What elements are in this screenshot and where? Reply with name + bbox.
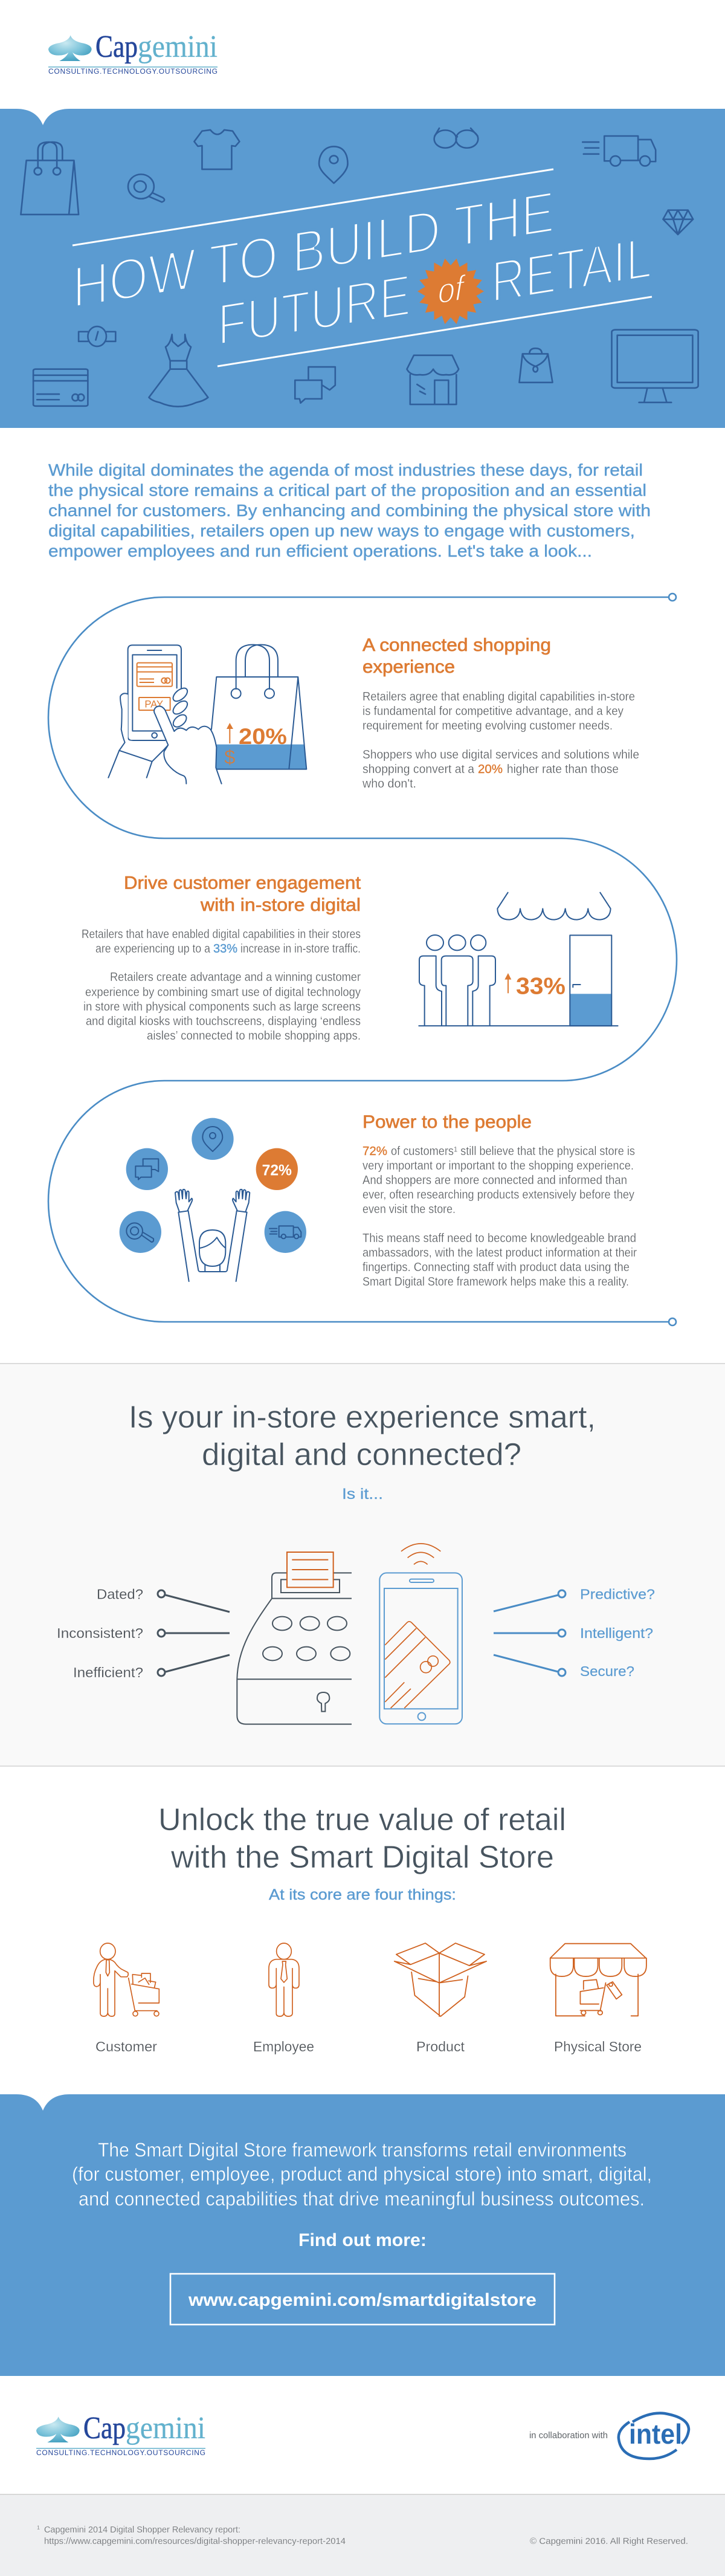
text block: connected shopping body: higher rate than those (507, 763, 619, 776)
text block: footnote: https://www.capgemini.com/resources/digital-shopper-relevancy-report-2014 (44, 2537, 346, 2546)
icon: glasses (434, 128, 478, 148)
heading: drive customer engagement: Drive customer engagement (124, 873, 361, 893)
intro text: channel for customers. By enhancing and combining the physical store with (48, 501, 651, 520)
text block: framework description: (for customer, employee, product and physical store) into smart, digital, (72, 2163, 652, 2185)
text block: in-store digital body: Retailers that have enabled digital capabilities in their stores (82, 928, 361, 941)
text block: in-store digital body: are experiencing up to a (95, 942, 211, 956)
icon: magnifier (128, 174, 164, 202)
heading: unlock the true value of retail: Unlock the true value of retail (158, 1802, 566, 1837)
logo: Capgemini header: Cap (95, 30, 138, 64)
panel: hero banner (0, 109, 725, 428)
intro text: the physical store remains a critical part of the proposition and an essential (48, 481, 646, 499)
labels: dated, inconsistent, inefficient: Dated? (97, 1586, 143, 1602)
icon: handbag (519, 348, 553, 383)
icon: shopping bag (21, 142, 79, 215)
text block: power to the people body: fingertips. Connecting staff with product data using the (362, 1261, 630, 1274)
labels: four things: Employee (253, 2039, 314, 2054)
text block: footnote: 1 (37, 2525, 40, 2531)
illustration: store traffic 33% (419, 893, 618, 1026)
text block: connected shopping body: is fundamental for competitive advantage, and a key (362, 705, 624, 718)
text block: power to the people body: Smart Digital Store framework helps make this a reality. (362, 1275, 629, 1289)
title: how to build the future of retail: of (438, 268, 466, 311)
illustration: cash register (237, 1552, 352, 1724)
text block: framework description: and connected capabilities that drive meaningful business outcomes. (79, 2188, 645, 2210)
intro text: digital capabilities, retailers open up new ways to engage with customers, (48, 521, 635, 540)
text: in collaboration with: in collaboration with (529, 2430, 608, 2441)
panel: in-store experience check (0, 1363, 725, 1767)
labels: dated, inconsistent, inefficient: Inconsistent? (57, 1625, 143, 1641)
logo: Capgemini footer: gemini (126, 2411, 205, 2445)
heading: unlock the true value of retail: with the Smart Digital Store (170, 1840, 554, 1875)
icon: delivery truck (582, 136, 656, 166)
labels: predictive, intelligent, secure (580, 1586, 655, 1679)
text block: in-store digital body: Retailers create advantage and a winning customer (110, 971, 361, 984)
text block: in-store digital body: and digital kiosks with touchscreens, displaying ‘endless (86, 1015, 361, 1028)
logo: intel (619, 2413, 689, 2459)
winding path connector (48, 594, 677, 1325)
text block: connected shopping body (362, 690, 639, 791)
illustration: phone payment and shopping bag: PAY (144, 699, 163, 710)
icon: credit card (33, 369, 88, 406)
text block: in-store digital body: experience by combining smart use of digital technology (85, 986, 361, 999)
button: url: www.capgemini.com/smartdigitalstore (188, 2290, 536, 2310)
text block: framework description: The Smart Digital Store framework transforms retail environments (98, 2139, 627, 2161)
icon: dress (149, 334, 208, 407)
text block: connected shopping body: shopping convert at a (362, 763, 475, 776)
labels: predictive, intelligent, secure: Predictive? (580, 1586, 655, 1602)
heading: a connected shopping experience: A connected shopping (362, 635, 551, 655)
heading: power to the people: Power to the people (362, 1112, 532, 1132)
text block: power to the people body: This means staff need to become knowledgeable brand (362, 1232, 636, 1245)
icon: employee (269, 1943, 299, 2016)
text block: power to the people body: 72% (362, 1145, 387, 1158)
heading: drive customer engagement: with in-store digital (200, 895, 361, 915)
text block: in-store digital body: in store with physical components such as large screens (83, 1000, 361, 1014)
panel: call to action (0, 2094, 725, 2376)
icon: chat bubbles (295, 367, 335, 403)
intro text: empower employees and run efficient operations. Let's take a look... (48, 542, 592, 560)
panel: footer (0, 2494, 725, 2576)
text block: connected shopping body: requirement for meeting evolving customer needs. (362, 719, 613, 733)
button: url (170, 2274, 555, 2325)
connector lines right (494, 1590, 566, 1676)
title: how to build the future of retail: FUTURE (218, 263, 411, 358)
icon: monitor (611, 330, 698, 403)
title: how to build the future of retail: RETAIL (491, 225, 652, 315)
icon: t-shirt (194, 130, 239, 169)
intro text (48, 461, 651, 560)
icon: watch (79, 326, 115, 346)
illustration: phone payment and shopping bag (108, 645, 306, 784)
subheading: is it: Is it... (342, 1486, 383, 1503)
title: how to build the future of retail: HOW TO BUILD THE (72, 180, 555, 320)
logo: Capgemini header (48, 30, 218, 76)
icon: shop (407, 355, 459, 404)
labels: four things: Customer (95, 2039, 157, 2054)
icon: diamond (663, 210, 693, 235)
labels: predictive, intelligent, secure: Intelligent? (580, 1625, 653, 1641)
icon: customer with cart (94, 1943, 159, 2016)
text block: power to the people body: And shoppers are more connected and informed than (362, 1174, 627, 1187)
logo: Capgemini footer (36, 2411, 205, 2457)
heading: find out more: Find out more: (298, 2230, 427, 2250)
text block: connected shopping body: Shoppers who use digital services and solutions while (362, 748, 639, 762)
illustration: store traffic 33%: 33% (516, 972, 566, 999)
logo: Capgemini footer: Cap (83, 2411, 126, 2445)
heading: unlock the true value of retail (158, 1802, 566, 1875)
icon: physical store (550, 1944, 646, 2016)
illustration: staff with connected services (120, 1118, 306, 1281)
text block: power to the people body: ever, often researching products extensively before they (362, 1188, 634, 1202)
text block: footnote: Capgemini 2014 Digital Shopper Relevancy report: (44, 2525, 240, 2535)
logo: Capgemini header: CONSULTING.TECHNOLOGY.OUTSOURCING (48, 67, 218, 76)
text block: power to the people body: of customers¹ still believe that the physical store is (391, 1145, 635, 1158)
text block: power to the people body: very important or important to the shopping experience. (362, 1159, 634, 1173)
text block: in-store digital body: 33% (213, 942, 237, 956)
heading: is your in-store experience smart (129, 1400, 596, 1472)
labels: four things (95, 2039, 642, 2054)
text block: in-store digital body (82, 928, 361, 1043)
illustration: smartphone with card (379, 1544, 462, 1724)
heading: is your in-store experience smart: Is your in-store experience smart, (129, 1400, 596, 1435)
labels: four things: Physical Store (554, 2039, 642, 2054)
text block: footnote (37, 2525, 346, 2546)
text block: in-store digital body: increase in in-store traffic. (240, 942, 361, 956)
heading: is your in-store experience smart: digital and connected? (202, 1437, 521, 1472)
heading: a connected shopping experience: experience (362, 657, 455, 677)
logo: Capgemini footer: CONSULTING.TECHNOLOGY.OUTSOURCING (36, 2448, 205, 2457)
labels: four things: Product (416, 2039, 465, 2054)
heading: a connected shopping experience (362, 635, 551, 677)
text block: power to the people body (362, 1145, 637, 1289)
text block: in-store digital body: aisles’ connected to mobile shopping apps. (147, 1029, 361, 1043)
text block: connected shopping body: 20% (478, 763, 503, 776)
text block: connected shopping body: who don't. (362, 777, 416, 791)
heading: drive customer engagement (124, 873, 361, 915)
subheading: at its core: At its core are four things: (269, 1886, 456, 1903)
text block: connected shopping body: Retailers agree that enabling digital capabilities in-store (362, 690, 635, 704)
illustration: staff with connected services: 72% (262, 1162, 292, 1179)
text block: framework description (72, 2139, 652, 2210)
icon: map pin (319, 146, 348, 183)
icon: product box (395, 1943, 486, 2016)
logo: Capgemini header: gemini (138, 30, 218, 64)
illustration: phone payment and shopping bag: 20% (239, 723, 287, 749)
text block: power to the people body: even visit the store. (362, 1203, 456, 1216)
labels: dated, inconsistent, inefficient (57, 1586, 143, 1680)
labels: predictive, intelligent, secure: Secure? (580, 1663, 634, 1679)
intro text: While digital dominates the agenda of most industries these days, for retail (48, 461, 643, 479)
logo: intel: intel (629, 2418, 682, 2450)
text block: power to the people body: ambassadors, with the latest product information at their (362, 1246, 637, 1260)
illustration: phone payment and shopping bag: $ (224, 746, 236, 769)
labels: dated, inconsistent, inefficient: Inefficient? (73, 1665, 143, 1680)
text: copyright: © Capgemini 2016. All Right Reserved. (530, 2537, 688, 2546)
connector lines left (158, 1590, 230, 1676)
